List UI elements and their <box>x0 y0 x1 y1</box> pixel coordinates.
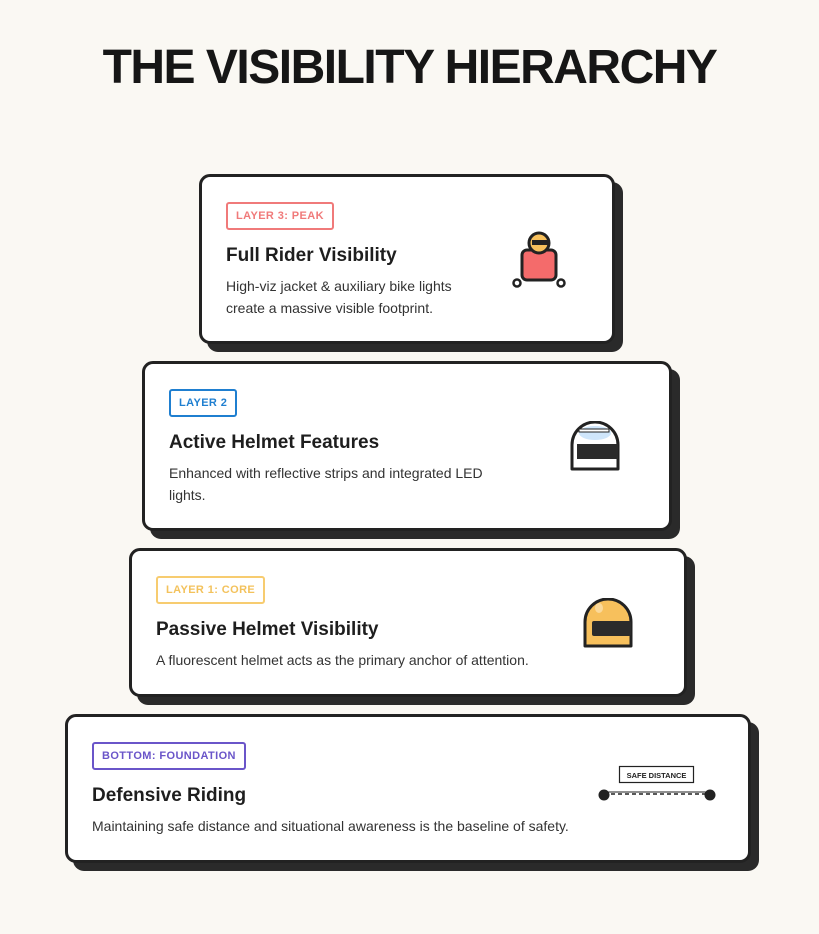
icon: rider <box>512 232 566 288</box>
badge: layer 3 <box>226 202 334 230</box>
panel: foundation <box>65 714 751 863</box>
description: A fluorescent helmet acts as the primary anchor of attention. <box>156 652 529 668</box>
badge: layer 2 <box>169 389 237 417</box>
panel: layer 1 core <box>129 548 687 697</box>
heading: full rider: Full Rider Visibility <box>226 245 397 266</box>
badge: foundation: BOTTOM: FOUNDATION <box>102 750 236 762</box>
description: Enhanced with reflective strips and integrated LED lights. <box>169 465 483 503</box>
badge: layer 3: LAYER 3: PEAK <box>236 210 324 222</box>
title: THE VISIBILITY HIERARCHY <box>103 41 716 94</box>
heading: defensive riding: Defensive Riding <box>92 785 246 806</box>
description: Maintaining safe distance and situational awareness is the baseline of safety. <box>92 818 569 834</box>
badge: foundation <box>92 742 246 770</box>
description: High-viz jacket & auxiliary bike lights create a massive visible footprint. <box>226 278 452 316</box>
badge: layer 1 <box>156 576 265 604</box>
heading: passive helmet: Passive Helmet Visibility <box>156 619 378 640</box>
icon: helmet with LED <box>570 421 620 470</box>
badge: layer 2: LAYER 2 <box>179 397 227 409</box>
icon: yellow helmet <box>584 598 632 648</box>
badge: layer 1: LAYER 1: CORE <box>166 584 255 596</box>
icon: safe distance: SAFE DISTANCE <box>627 771 686 780</box>
panel: layer 3 peak <box>199 174 615 344</box>
panel: layer 2 <box>142 361 672 531</box>
icon: safe distance <box>598 766 716 800</box>
heading: active helmet: Active Helmet Features <box>169 432 379 453</box>
